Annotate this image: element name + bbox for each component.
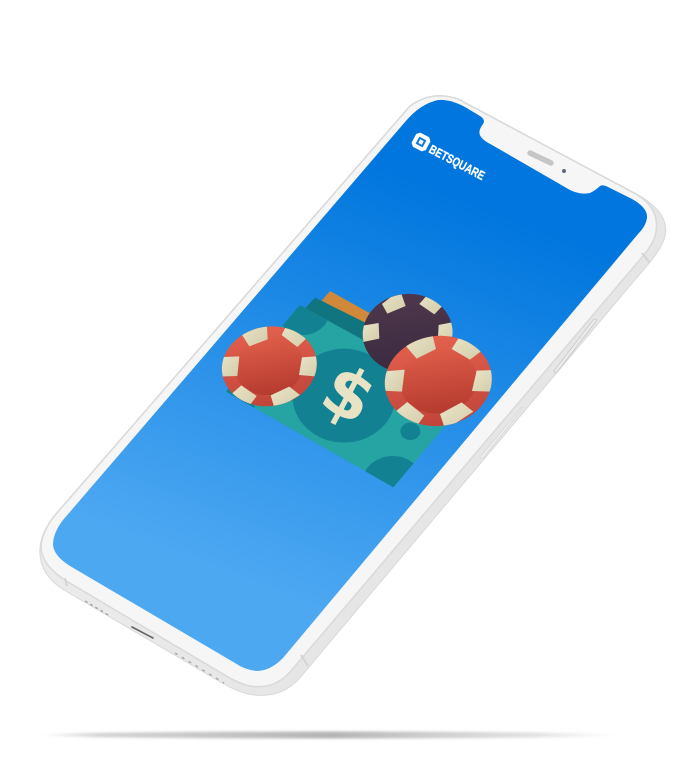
banknote: [226, 305, 446, 488]
logo: BETSQUARE: [410, 131, 487, 183]
antenna bands: [65, 253, 650, 666]
phone body: [40, 96, 666, 695]
banknote centre medallion: [292, 349, 396, 443]
side button lower: [480, 407, 523, 459]
phone front face: [41, 96, 657, 687]
dark poker chip: [362, 294, 453, 369]
right red poker chip: [384, 336, 492, 426]
dollar sign: $: [309, 349, 388, 441]
orange band: [322, 291, 372, 325]
phone mockup illustration: [39, 95, 666, 740]
bottom speaker and port: [85, 601, 224, 683]
money and poker chips illustration: [222, 291, 492, 488]
banknote corner left: [226, 388, 255, 408]
banknote corner bottom: [365, 456, 414, 488]
banknote dot: [400, 423, 420, 440]
logo wordmark: BETSQUARE: [427, 142, 487, 183]
phone: [40, 96, 666, 695]
ground shadow: [40, 732, 624, 738]
logo icon: [410, 131, 432, 153]
screen: [53, 100, 647, 671]
banknote corner top: [282, 305, 328, 335]
back banknote: [305, 298, 373, 340]
side button: [554, 319, 597, 372]
speaker grille: [530, 153, 551, 163]
camera: [562, 169, 566, 173]
left red poker chip: [222, 326, 317, 406]
